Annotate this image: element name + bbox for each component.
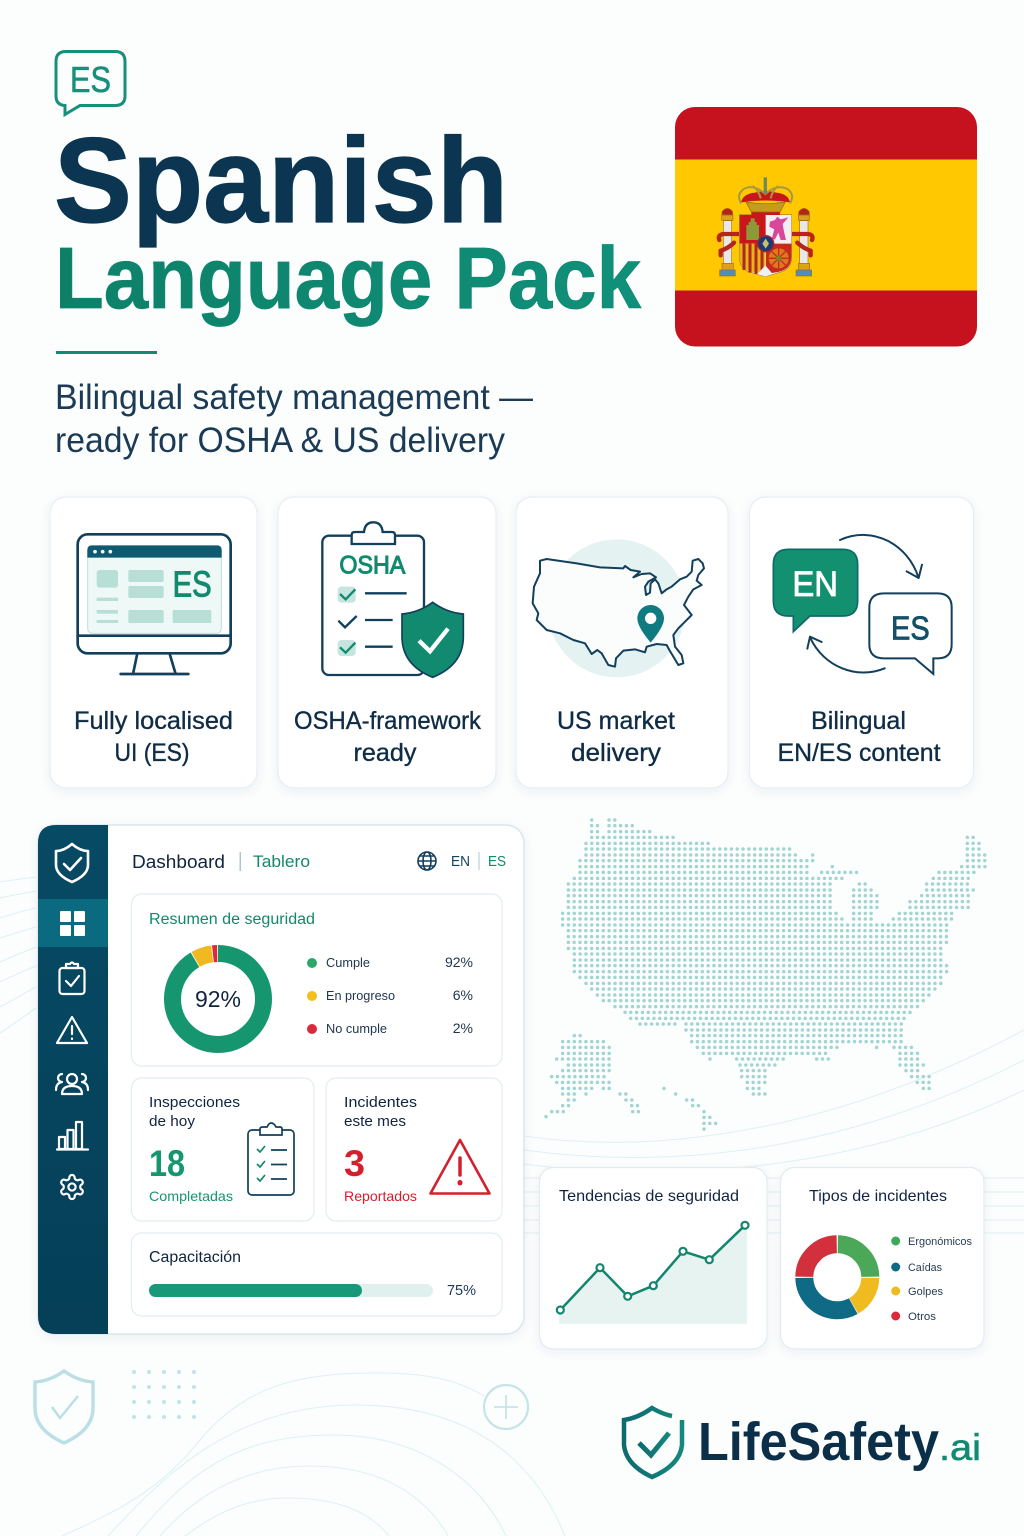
panel: US market delivery <box>516 497 728 788</box>
legend <box>307 954 473 1036</box>
card: inspections: Completadas <box>149 1188 233 1204</box>
card: incidents: 3 <box>344 1143 365 1184</box>
label: OSHA-framework <box>294 707 481 735</box>
icon: warning <box>57 1017 87 1043</box>
icon: people <box>56 1074 88 1094</box>
logo: LifeSafety.ai: .ai <box>939 1427 981 1468</box>
subtitle: ready for OSHA & US delivery <box>55 421 505 460</box>
card: incidents: Reportados <box>344 1188 417 1204</box>
card: safety summary <box>132 894 502 1066</box>
legend: Golpes <box>908 1286 943 1298</box>
subtitle <box>55 378 533 460</box>
crown <box>751 211 780 215</box>
icon: checklist <box>248 1123 294 1195</box>
coat of arms <box>719 177 813 277</box>
card: inspections: 18 <box>149 1143 185 1184</box>
label <box>778 707 941 767</box>
icon: EN ES exchange bubbles: ES <box>891 610 930 647</box>
panel: dashboard <box>38 825 524 1334</box>
line chart <box>557 1222 748 1324</box>
label: Fully localised <box>74 707 233 735</box>
card: incidents: este mes <box>344 1113 406 1130</box>
title: Language Pack: Language Pack <box>55 230 642 327</box>
icon: clipboard <box>60 962 84 994</box>
donut chart: 92% <box>172 954 264 1044</box>
legend <box>891 1236 972 1323</box>
icon: OSHA clipboard and shield <box>322 522 463 677</box>
dotted US map <box>546 820 985 1129</box>
card: safety summary: 92% <box>195 986 241 1012</box>
label <box>557 707 675 767</box>
logo: LifeSafety.ai <box>624 1408 981 1477</box>
icon: monitor with ES interface: ES <box>173 564 212 605</box>
legend: No cumple <box>326 1022 387 1036</box>
dashboard header: ES <box>488 854 506 870</box>
icon: bar chart <box>57 1122 88 1150</box>
donut chart <box>804 1244 870 1310</box>
badge: ES speech bubble: ES <box>70 59 111 100</box>
panel: incident types chart: Tipos de incidentes <box>809 1188 947 1205</box>
card: incidents: Incidentes <box>344 1094 417 1111</box>
dashboard header: EN <box>451 854 470 870</box>
panel: safety trends chart: Tendencias de seguridad <box>559 1188 739 1205</box>
flag of Spain <box>675 107 977 346</box>
label: UI (ES) <box>114 739 190 767</box>
label: ready <box>354 739 417 767</box>
legend: 6% <box>453 987 473 1003</box>
shield <box>739 215 792 277</box>
label: EN/ES content <box>778 739 941 767</box>
legend: En progreso <box>326 989 395 1003</box>
card: training progress: 75% <box>447 1283 476 1299</box>
label <box>74 707 233 767</box>
card: inspections: de hoy <box>149 1113 196 1130</box>
legend: Caídas <box>908 1262 942 1274</box>
icon: US map with pin <box>533 539 704 677</box>
divider rule <box>56 351 157 354</box>
icon: OSHA clipboard and shield: OSHA <box>339 552 406 579</box>
logo: LifeSafety.ai: LifeSafety <box>698 1412 939 1472</box>
panel: Bilingual content <box>750 497 974 788</box>
card: incidents <box>326 1078 502 1221</box>
icon: faint plus circle <box>484 1385 528 1429</box>
title: Spanish: Spanish <box>54 112 508 248</box>
icon: logo shield <box>624 1408 682 1477</box>
ribbons <box>719 234 813 255</box>
panel: Fully localised UI <box>50 497 257 788</box>
legend: Otros <box>908 1311 937 1323</box>
panel: safety trends chart <box>540 1168 767 1349</box>
icon: EN ES exchange bubbles <box>773 535 952 674</box>
icon: faint shield <box>35 1371 93 1443</box>
card: safety summary: Resumen de seguridad <box>149 911 315 928</box>
badge: ES speech bubble <box>56 52 125 114</box>
card: inspections: Inspecciones <box>149 1094 240 1111</box>
dot grid decoration <box>134 1372 195 1417</box>
card: training progress <box>132 1233 502 1316</box>
icon: gear <box>61 1175 83 1199</box>
panel: OSHA-framework ready <box>278 497 496 788</box>
subtitle: Bilingual safety management — <box>55 378 533 417</box>
legend: 92% <box>445 954 473 970</box>
legend: Ergonómicos <box>908 1236 972 1248</box>
dashboard header: Tablero <box>253 852 310 871</box>
icon: shield <box>56 844 88 882</box>
card: inspections <box>132 1078 314 1221</box>
sidebar <box>38 825 108 1334</box>
icon: warning triangle <box>430 1140 490 1194</box>
icon: grid <box>60 911 85 936</box>
dashboard header: Dashboard <box>132 851 225 872</box>
legend: 2% <box>453 1020 473 1036</box>
pillars <box>720 208 812 276</box>
card: training progress: Capacitación <box>149 1249 241 1266</box>
dashboard header <box>132 851 506 872</box>
label: Bilingual <box>811 707 906 735</box>
label: US market <box>557 707 675 735</box>
legend: Cumple <box>326 956 370 970</box>
label: delivery <box>571 739 662 767</box>
label <box>294 707 481 767</box>
panel: incident types chart <box>780 1168 984 1349</box>
icon: globe <box>418 852 436 870</box>
icon: monitor with ES interface <box>78 534 231 674</box>
icon: EN ES exchange bubbles: EN <box>792 565 838 604</box>
